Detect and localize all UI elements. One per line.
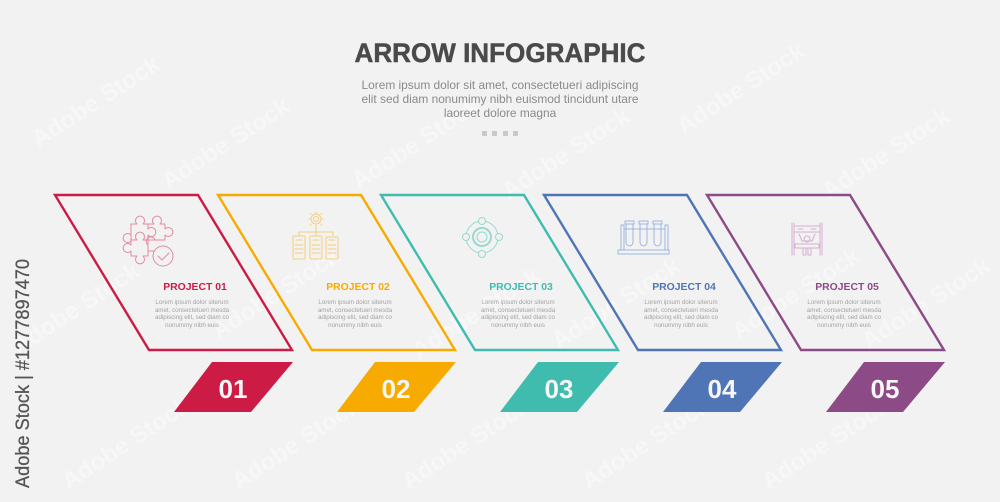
icon: gear cycle xyxy=(462,218,502,258)
panel: project 03 xyxy=(381,195,618,350)
body text: nonummy nibh euis xyxy=(165,322,219,329)
body text: adipiscing elit, sed diam co xyxy=(318,314,393,321)
text: Adobe Stock xyxy=(27,50,165,153)
panel: project 05 xyxy=(707,195,944,350)
text: Adobe Stock xyxy=(497,102,635,205)
text: Adobe Stock xyxy=(577,392,715,495)
intro text: elit sed diam nonumimy nibh euismod tincidunt utare xyxy=(362,92,639,106)
body text: adipiscing elit, sed diam co xyxy=(481,314,556,321)
title: ARROW INFOGRAPHIC xyxy=(354,38,646,68)
body text: amet, consectetueri mesda xyxy=(807,307,882,314)
panel: project 01 xyxy=(55,195,292,350)
body text: amet, consectetueri mesda xyxy=(644,307,719,314)
number tab 03: 03 xyxy=(545,374,573,404)
number tab 02 xyxy=(337,362,456,412)
text: Adobe Stock xyxy=(547,252,685,355)
body text: Lorem ipsum dolor siterum xyxy=(644,299,718,306)
text: Adobe Stock xyxy=(7,257,145,360)
body text: nonummy nibh euis xyxy=(654,322,708,329)
text: Adobe Stock xyxy=(347,92,485,195)
body text: Lorem ipsum dolor siterum xyxy=(318,299,392,306)
body text xyxy=(318,299,393,329)
body text xyxy=(807,299,882,329)
text: Adobe Stock xyxy=(397,392,535,495)
body text: amet, consectetueri mesda xyxy=(481,307,556,314)
text: Adobe Stock xyxy=(407,262,545,365)
heading: PROJECT 04 xyxy=(652,282,716,293)
stock id watermark: Adobe Stock | #1277897470 xyxy=(13,259,34,488)
body text: amet, consectetueri mesda xyxy=(155,307,230,314)
body text xyxy=(155,299,230,329)
body text xyxy=(644,299,719,329)
number tab 03 xyxy=(500,362,619,412)
body text: nonummy nibh euis xyxy=(328,322,382,329)
text: Adobe Stock xyxy=(817,102,955,205)
number tab 02: 02 xyxy=(382,374,410,404)
icon: person at barrier xyxy=(792,223,822,255)
title dots xyxy=(482,131,518,136)
text: Adobe Stock xyxy=(57,392,195,495)
number tab 04 xyxy=(663,362,782,412)
body text: adipiscing elit, sed diam co xyxy=(807,314,882,321)
text: Adobe Stock xyxy=(227,392,365,495)
icon: test tubes xyxy=(618,221,669,254)
icon: server hierarchy xyxy=(293,212,338,259)
body text: Lorem ipsum dolor siterum xyxy=(807,299,881,306)
number tab 05 xyxy=(826,362,945,412)
text: Adobe Stock xyxy=(672,37,810,140)
body text xyxy=(481,299,556,329)
text: Adobe Stock xyxy=(207,242,345,345)
intro text xyxy=(362,78,639,120)
body text: nonummy nibh euis xyxy=(491,322,545,329)
body text: Lorem ipsum dolor siterum xyxy=(155,299,229,306)
body text: Lorem ipsum dolor siterum xyxy=(481,299,555,306)
number tab 04: 04 xyxy=(708,374,737,404)
body text: adipiscing elit, sed diam co xyxy=(155,314,230,321)
body text: nonummy nibh euis xyxy=(817,322,871,329)
text: Adobe Stock xyxy=(727,242,865,345)
heading: PROJECT 03 xyxy=(489,282,553,293)
heading: PROJECT 02 xyxy=(326,282,390,293)
number tab 05: 05 xyxy=(871,374,899,404)
heading: PROJECT 05 xyxy=(815,282,879,293)
intro text: laoreet dolore magna xyxy=(444,106,557,120)
heading: PROJECT 01 xyxy=(163,282,227,293)
intro text: Lorem ipsum dolor sit amet, consectetueri adipiscing xyxy=(362,78,638,92)
number tab 01 xyxy=(174,362,293,412)
text: Adobe Stock xyxy=(757,392,895,495)
text: Adobe Stock xyxy=(157,92,295,195)
panel: project 02 xyxy=(218,195,455,350)
body text: amet, consectetueri mesda xyxy=(318,307,393,314)
body text: adipiscing elit, sed diam co xyxy=(644,314,719,321)
text: Adobe Stock xyxy=(857,252,995,355)
panel: project 04 xyxy=(544,195,781,350)
icon: puzzle with check xyxy=(123,216,173,266)
number tab 01: 01 xyxy=(219,374,247,404)
